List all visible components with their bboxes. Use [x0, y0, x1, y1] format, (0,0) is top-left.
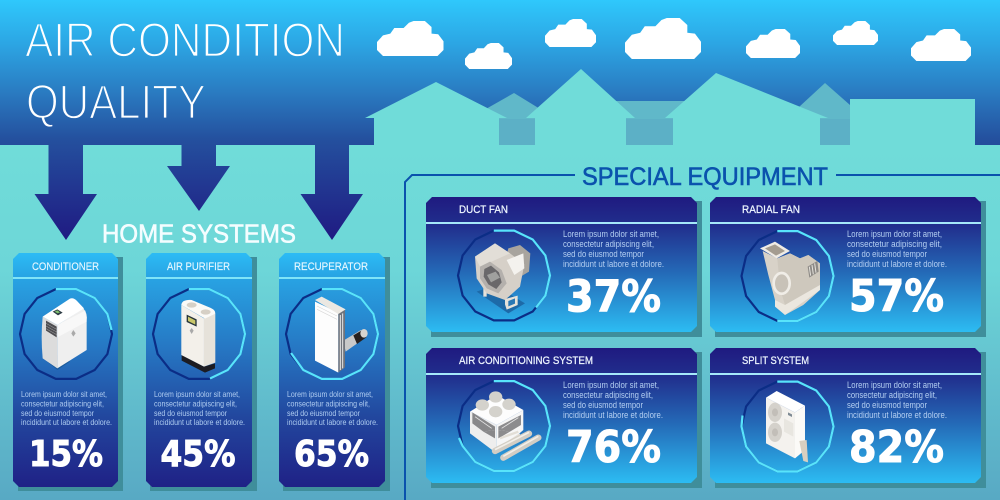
body text: sed do eiusmod tempor: [847, 249, 927, 259]
progress ring: air purifier: [153, 289, 245, 379]
icon: duct fan: [475, 243, 530, 313]
panel: split system: [710, 348, 986, 488]
body text: sed do eiusmod tempor: [154, 408, 227, 418]
body text: Lorem ipsum dolor sit amet,: [563, 229, 659, 239]
body text: [563, 380, 663, 420]
icon: air conditioning unit: [470, 391, 538, 458]
label: conditioner: CONDITIONER: [32, 261, 99, 273]
body text: incididunt ut labore et dolore.: [287, 417, 378, 427]
arrow 2: [167, 144, 230, 211]
body text: [287, 389, 378, 427]
sky band: [0, 0, 1000, 145]
heading: home systems: HOME SYSTEMS: [102, 218, 296, 248]
progress ring: duct fan: [458, 231, 550, 320]
panel: air conditioning system: [426, 348, 702, 488]
body text: sed do eiusmod tempor: [563, 249, 644, 259]
title: AIR CONDITION: [25, 14, 345, 68]
label: air conditioning system: AIR CONDITIONING SYSTEM: [459, 355, 593, 367]
body text: Lorem ipsum dolor sit amet,: [287, 389, 373, 399]
progress ring: air conditioning system: [458, 381, 550, 471]
icon: radial fan: [760, 242, 820, 315]
title: QUALITY: [26, 76, 206, 130]
progress ring: conditioner: [20, 289, 112, 379]
clouds: [377, 18, 971, 69]
label: split system: SPLIT SYSTEM: [742, 355, 809, 367]
body text: sed do eiusmod tempor: [287, 408, 360, 418]
value: 45%: [160, 434, 236, 475]
label: air purifier: AIR PURIFIER: [167, 261, 230, 273]
label: recuperator: RECUPERATOR: [294, 261, 368, 273]
progress ring: radial fan: [742, 231, 834, 321]
body text: [847, 229, 947, 269]
body text: consectetur adipiscing elit,: [847, 390, 937, 400]
body text: consectetur adipiscing elit,: [154, 398, 237, 408]
icon: recuperator: [315, 297, 368, 373]
body text: incididunt ut labore et dolore.: [154, 417, 245, 427]
body text: incididunt ut labore et dolore.: [563, 410, 663, 420]
panel: recuperator: [279, 253, 390, 491]
body text: [21, 389, 112, 427]
value: 15%: [29, 434, 103, 475]
body text: incididunt ut labore et dolore.: [563, 259, 664, 269]
value: 82%: [849, 422, 944, 473]
label: radial fan: RADIAL FAN: [742, 204, 800, 216]
heading: special equipment: SPECIAL EQUIPMENT: [582, 163, 828, 191]
body text: Lorem ipsum dolor sit amet,: [21, 389, 107, 399]
arrow 1: [34, 144, 97, 240]
panel: air purifier: [146, 253, 257, 491]
value: 76%: [566, 422, 661, 473]
panel: radial fan: [710, 197, 986, 337]
body text: Lorem ipsum dolor sit amet,: [847, 229, 942, 239]
body text: [847, 380, 947, 420]
label: duct fan: DUCT FAN: [459, 204, 508, 216]
body text: consectetur adipiscing elit,: [563, 390, 653, 400]
body text: incididunt ut labore et dolore.: [847, 410, 947, 420]
body text: [563, 229, 664, 269]
arrow 3: [300, 144, 363, 240]
body text: Lorem ipsum dolor sit amet,: [847, 380, 942, 390]
body text: consectetur adipiscing elit,: [563, 239, 654, 249]
icon: split system outdoor unit: [766, 391, 808, 462]
body text: Lorem ipsum dolor sit amet,: [563, 380, 659, 390]
value: 37%: [566, 272, 661, 322]
body text: incididunt ut labore et dolore.: [847, 259, 947, 269]
body text: consectetur adipiscing elit,: [847, 239, 942, 249]
body text: Lorem ipsum dolor sit amet,: [154, 389, 240, 399]
body text: sed do eiusmod tempor: [847, 400, 927, 410]
title: [25, 14, 345, 130]
panel: conditioner: [13, 253, 123, 491]
houses skyline: [365, 69, 1000, 147]
icon: air purifier: [181, 300, 215, 373]
body text: consectetur adipiscing elit,: [21, 398, 104, 408]
body text: consectetur adipiscing elit,: [287, 398, 370, 408]
value: 57%: [849, 271, 944, 322]
body text: sed do eiusmod tempor: [563, 400, 643, 410]
body text: sed do eiusmod tempor: [21, 408, 94, 418]
body text: [154, 389, 245, 427]
progress ring: split system: [742, 382, 834, 471]
progress ring: recuperator: [286, 289, 378, 379]
icon: portable conditioner: [42, 298, 87, 370]
panel: special equipment frame: [405, 175, 1000, 500]
panel: duct fan: [426, 197, 702, 337]
value: 65%: [294, 434, 369, 475]
body text: incididunt ut labore et dolore.: [21, 417, 112, 427]
